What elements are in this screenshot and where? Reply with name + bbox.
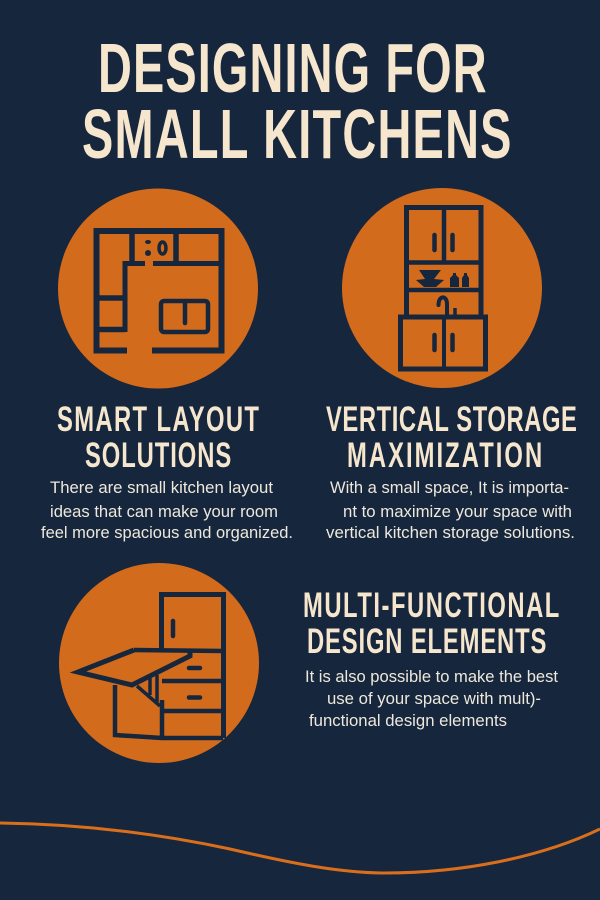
panel: multi-functional design elements (59, 563, 559, 763)
text block: With a small space, It is importa- (330, 478, 569, 497)
icon detail: bottles (450, 273, 469, 287)
heading: DESIGN ELEMENTS (307, 623, 546, 661)
icon detail: stacked bowls (416, 270, 444, 287)
heading (57, 401, 259, 475)
text block: nt to maximize your space with (343, 502, 572, 521)
panel: smart layout solutions (41, 188, 293, 542)
text block: There are small kitchen layout (50, 478, 273, 497)
heading: MULTI-FUNCTIONAL (303, 587, 559, 625)
heading (303, 587, 559, 661)
text block: functional design elements (309, 711, 507, 730)
title (82, 29, 511, 173)
text block (41, 478, 293, 542)
heading: SOLUTIONS (85, 437, 231, 475)
icon detail: faucet (438, 297, 447, 315)
text block: use of your space with mult)- (327, 689, 541, 708)
decorative orange wave (0, 823, 600, 873)
icon: tall cabinet with shelves (342, 188, 542, 388)
icon: fold-down table and cabinet (59, 563, 259, 763)
icon: kitchen floor plan (58, 188, 258, 388)
heading: SMART LAYOUT (57, 401, 259, 439)
title: SMALL KITCHENS (82, 95, 511, 173)
text block (305, 667, 558, 730)
text block: ideas that can make your room (50, 502, 278, 521)
text block (326, 478, 575, 542)
panel: vertical storage maximization (326, 188, 577, 542)
text block: It is also possible to make the best (305, 667, 558, 686)
heading (326, 401, 577, 475)
text block: vertical kitchen storage solutions. (326, 523, 575, 542)
heading: MAXIMIZATION (347, 437, 542, 475)
text block: feel more spacious and organized. (41, 523, 293, 542)
heading: VERTICAL STORAGE (326, 401, 577, 439)
title: DESIGNING FOR (98, 29, 487, 107)
